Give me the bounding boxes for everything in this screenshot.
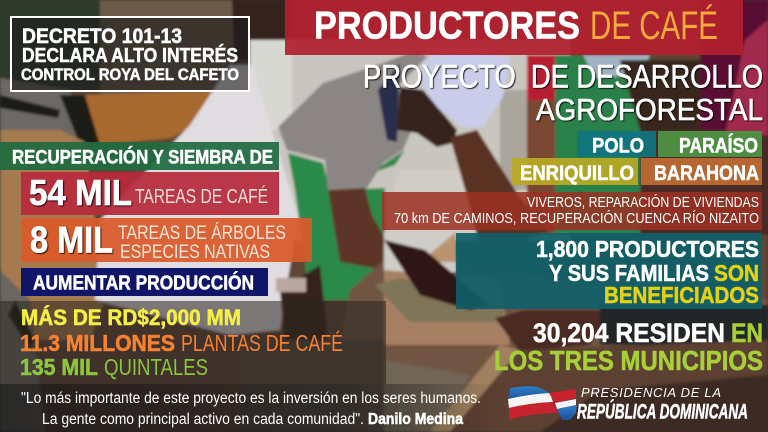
icon: Dominican flag: [508, 386, 577, 420]
panel: 8 mil tareas de árboles: ESPECIES NATIVAS: [120, 241, 270, 263]
heading: recuperación y siembra: RECUPERACIÓN Y SIEMBRA DE: [12, 144, 273, 168]
foliage and wall: [0, 0, 110, 90]
callout: 30,204 residen: 30,204 RESIDEN: [533, 318, 725, 348]
panel: beneficiarios: Y SUS FAMILIAS: [549, 260, 709, 286]
panel: decree: DECRETO 101-13: [22, 25, 182, 48]
title: [285, 0, 743, 55]
tile: Enriquillo: ENRIQUILLO: [520, 161, 634, 185]
quote: Danilo Medina: "Lo más importante de este proyecto es la inversión en los seres humanos.: [21, 390, 481, 407]
quote: Danilo Medina: [0, 384, 500, 432]
title: DE CAFÉ: [590, 3, 718, 48]
tile: Paraíso: [658, 131, 762, 158]
subtitle: proyecto de desarrollo agroforestal: [363, 58, 763, 127]
panel: beneficiarios: [456, 233, 762, 309]
panel: decree: CONTROL ROYA DEL CAFETO: [21, 66, 239, 84]
callout: 30,204 residen: EN: [731, 318, 763, 348]
panel: production figures: 11.3 MILLONES: [20, 330, 175, 356]
center man: [288, 153, 385, 300]
panel: decree: [11, 17, 249, 91]
panel: 54 mil tareas de café: 54 MIL: [29, 172, 132, 213]
right hand people: [527, 55, 567, 100]
quote: Danilo Medina: La gente como principal activo en cada comunidad".: [42, 411, 364, 428]
heading: aumentar producción: AUMENTAR PRODUCCIÓN: [33, 270, 254, 294]
title: PRODUCTORES: [314, 4, 580, 48]
panel: production figures: [0, 301, 386, 384]
callout: 30,204 residen: [494, 318, 763, 376]
panel: production figures: MÁS DE RD$2,000 MM: [21, 305, 241, 330]
panel: beneficiarios: SON: [714, 260, 759, 286]
logo: Presidencia de la República Dominicana: [508, 385, 748, 424]
panel: production figures: PLANTAS DE CAFÉ: [181, 330, 343, 356]
panel: 8 mil tareas de árboles: TAREAS DE ÁRBOLES: [118, 221, 286, 244]
panel: production figures: QUINTALES: [104, 354, 208, 380]
panel: 8 mil tareas de árboles: [21, 218, 312, 263]
panel: production figures: 135 MIL: [20, 354, 98, 380]
tile: Polo: POLO: [592, 134, 644, 158]
tile: Polo: [577, 131, 656, 158]
heading: recuperación y siembra: [0, 142, 279, 170]
logo: Presidencia de la República Dominicana: PRESIDENCIA DE LA: [581, 385, 721, 400]
panel: viveros y caminos: [382, 192, 762, 230]
table and beans: [330, 260, 768, 432]
panel: decree: DECLARA ALTO INTERÉS: [22, 44, 238, 67]
panel: 54 mil tareas de café: [21, 172, 279, 215]
panel: 54 mil tareas de café: TAREAS DE CAFÉ: [135, 185, 268, 208]
older man, left: [100, 0, 235, 100]
quote: Danilo Medina: Danilo Medina: [368, 411, 463, 428]
panel: 8 mil tareas de árboles: 8 MIL: [30, 220, 113, 260]
